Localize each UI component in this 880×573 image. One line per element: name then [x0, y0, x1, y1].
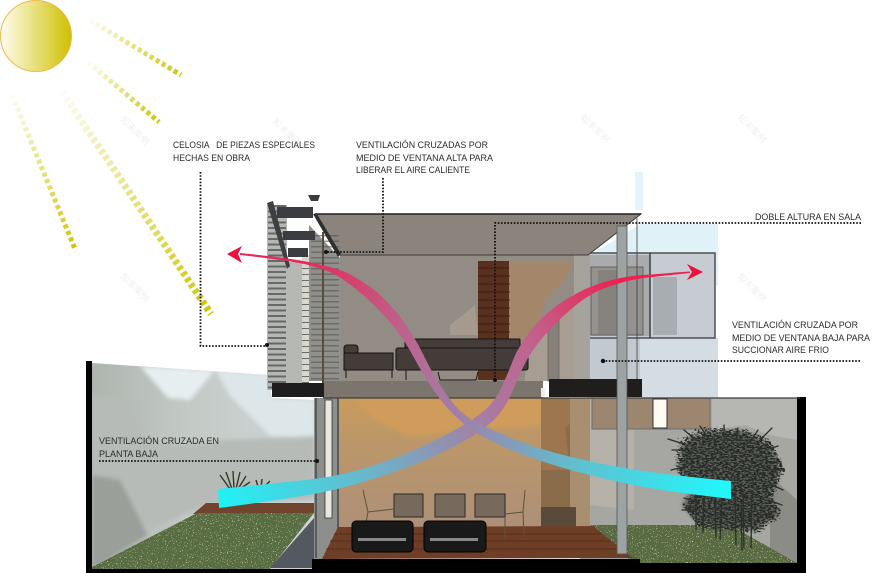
lower left glazing: [314, 398, 339, 560]
column: [617, 226, 627, 554]
airflow curve: cold to hot, towards left: [227, 246, 731, 499]
deck: [322, 526, 633, 559]
right courtyard: [580, 397, 806, 573]
grass: [92, 513, 314, 569]
label: celosia: HECHAS EN OBRA: [173, 153, 251, 164]
dining chairs: [363, 490, 525, 540]
dotted leader: planta baja: [99, 459, 319, 463]
watermarks: 知末案例: [579, 112, 612, 145]
label: ventana alta: LIBERAR EL AIRE CALIENTE: [356, 165, 470, 176]
base: [272, 383, 324, 397]
plants: [220, 471, 270, 489]
airflow curve: cold to hot, towards right: [218, 264, 703, 508]
watermarks: 知末案例: [119, 114, 152, 147]
icon: sun: [0, 0, 72, 72]
label: celosia: CELOSIA DE PIEZAS ESPECIALES: [173, 140, 315, 151]
dotted leader: ventana baja: [601, 359, 860, 363]
black armchairs: [352, 521, 486, 552]
floor black: [312, 559, 640, 573]
wall: [580, 398, 797, 563]
dotted leader: doble altura: [493, 223, 861, 382]
label: planta baja: VENTILACIÓN CRUZADA EN: [99, 436, 219, 447]
black beam right: [549, 379, 642, 397]
arrow head right: [687, 264, 703, 280]
facade wall: [587, 338, 718, 398]
watermarks: [119, 112, 769, 304]
watermarks: 知末案例: [271, 116, 304, 149]
bamboo: [668, 425, 784, 550]
sky: [635, 172, 643, 210]
black wall: [797, 397, 806, 573]
deck: [193, 503, 314, 514]
upper right facade: [587, 172, 718, 398]
sofas: [344, 339, 528, 380]
label: planta baja: PLANTA BAJA: [99, 449, 159, 460]
label: ventana alta: MEDIO DE VENTANA ALTA PARA: [356, 153, 494, 164]
watermarks: 知末案例: [119, 271, 152, 304]
house section: [267, 195, 800, 573]
windows: [592, 398, 710, 429]
label: doble altura: DOBLE ALTURA EN SALA: [755, 212, 862, 223]
icon: sun rays: [12, 20, 211, 314]
window: [588, 253, 715, 338]
right glass strip: [574, 255, 590, 380]
label: ventana baja: SUCCIONAR AIRE FRIO: [732, 345, 829, 356]
left courtyard: [86, 361, 326, 573]
dotted leader: celosia: [200, 172, 269, 347]
watermarks: 知末案例: [736, 271, 769, 304]
label: ventana alta: VENTILACIÓN CRUZADAS POR: [356, 140, 488, 151]
watermarks: 知末案例: [736, 112, 769, 145]
walkway: [270, 518, 314, 568]
label: ventana baja: VENTILACIÓN CRUZADA POR: [732, 320, 858, 331]
wall black edge: [86, 361, 92, 573]
ceiling: [315, 214, 641, 255]
upper level wall: [340, 255, 588, 381]
grass: [590, 525, 797, 563]
beams: [277, 207, 313, 218]
wood panel: [478, 261, 509, 339]
left lattice screen: [267, 195, 342, 397]
dotted leader: ventana alta: [324, 178, 383, 254]
label: ventana baja: MEDIO DE VENTANA BAJA PARA: [732, 333, 871, 344]
slab: [323, 381, 543, 398]
lower level wall: [338, 398, 541, 528]
courtyard wall: [92, 363, 314, 569]
arrow head left: [227, 246, 242, 263]
